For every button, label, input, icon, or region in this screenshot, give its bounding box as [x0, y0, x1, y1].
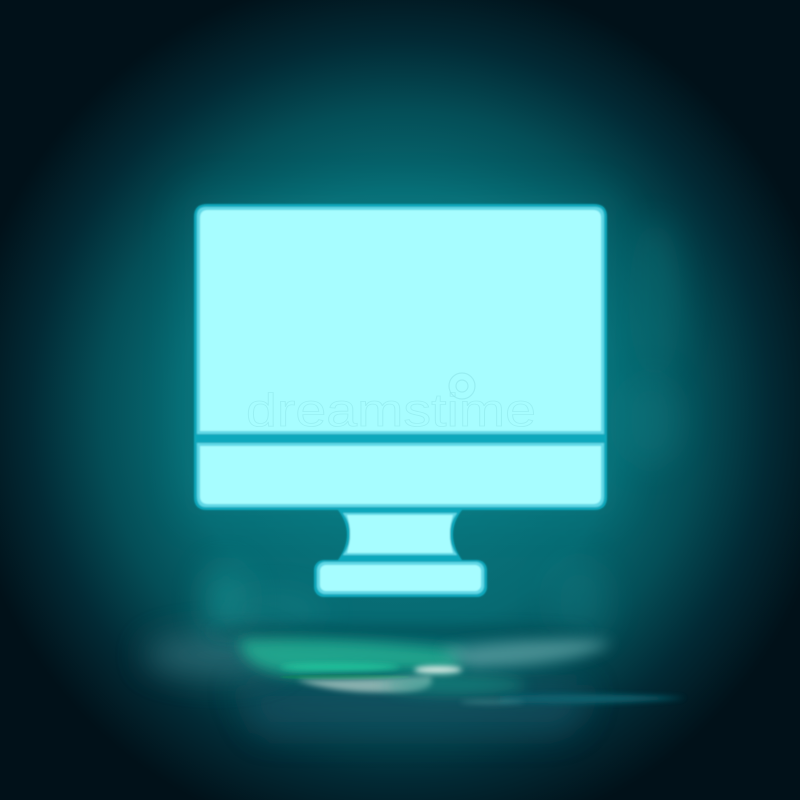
monitor screen	[194, 204, 607, 440]
smoke right of monitor	[549, 220, 681, 640]
icon: monitor	[194, 204, 607, 597]
monitor glow halo	[185, 195, 616, 515]
monitor chin	[194, 434, 607, 510]
smoke on floor	[145, 566, 686, 733]
monitor base	[314, 560, 487, 597]
watermark logo	[449, 373, 475, 399]
monitor stand neck	[338, 510, 462, 560]
watermark: dreamstime	[246, 384, 536, 436]
